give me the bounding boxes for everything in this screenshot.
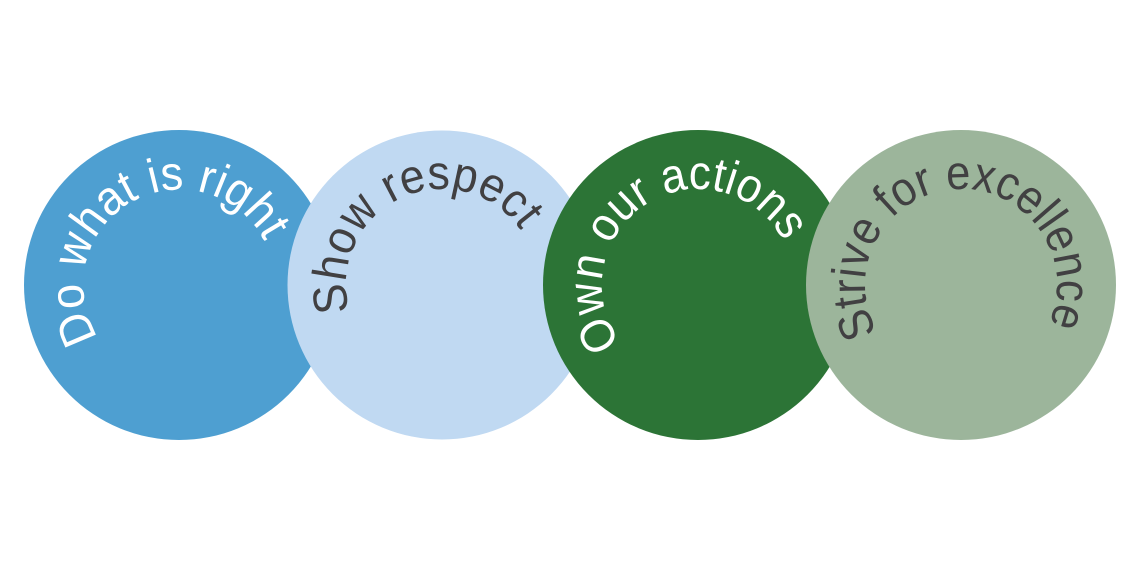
circle: Own our actions xyxy=(543,130,830,440)
circle: Strive for excellence xyxy=(806,130,1116,440)
circle: Show respect xyxy=(288,130,570,440)
circle: Show respect: Show respect xyxy=(311,163,542,312)
circle: Strive for excellence: Strive for excellence xyxy=(830,163,1082,340)
circle: Do what is right: Do what is right xyxy=(58,158,289,348)
circle: Do what is right xyxy=(24,130,311,440)
circle: Own our actions: Own our actions xyxy=(576,160,802,352)
